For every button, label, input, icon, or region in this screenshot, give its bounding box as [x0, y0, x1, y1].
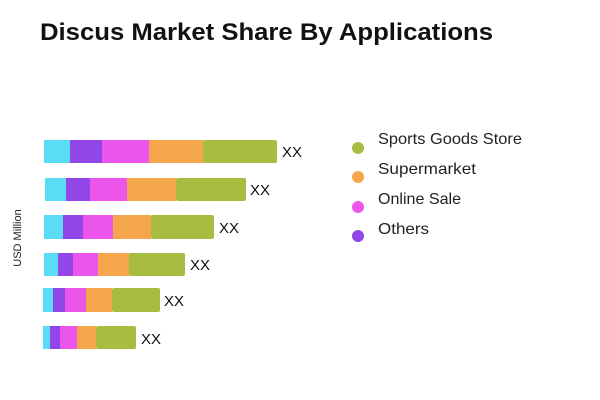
- bar 6: [43, 326, 161, 349]
- legend item: Others: [352, 221, 429, 242]
- bar 2: [45, 178, 270, 201]
- legend: [352, 131, 522, 242]
- axis label: USD Million: [12, 209, 24, 267]
- bar 3: [44, 215, 239, 239]
- bar chart: [43, 140, 302, 349]
- bar 6: XX: [141, 331, 161, 348]
- legend item: Online Sale: [352, 191, 461, 213]
- bar 1: [44, 140, 302, 163]
- legend item: Supermarket: Supermarket: [378, 161, 477, 178]
- bar 3: XX: [219, 220, 239, 237]
- legend item: Others: Others: [378, 221, 429, 238]
- bar 2: XX: [250, 182, 270, 199]
- legend item: Online Sale: Online Sale: [378, 191, 461, 208]
- title: Discus Market Share By Applications: [40, 19, 493, 46]
- legend item: Supermarket: [352, 161, 477, 183]
- bar 4: [44, 253, 210, 276]
- legend item: Sports Goods Store: Sports Goods Store: [378, 131, 522, 148]
- bar 1: XX: [282, 144, 302, 161]
- bar 5: XX: [164, 293, 184, 310]
- legend item: Sports Goods Store: [352, 131, 522, 154]
- bar 4: XX: [190, 257, 210, 274]
- bar 5: [43, 288, 184, 312]
